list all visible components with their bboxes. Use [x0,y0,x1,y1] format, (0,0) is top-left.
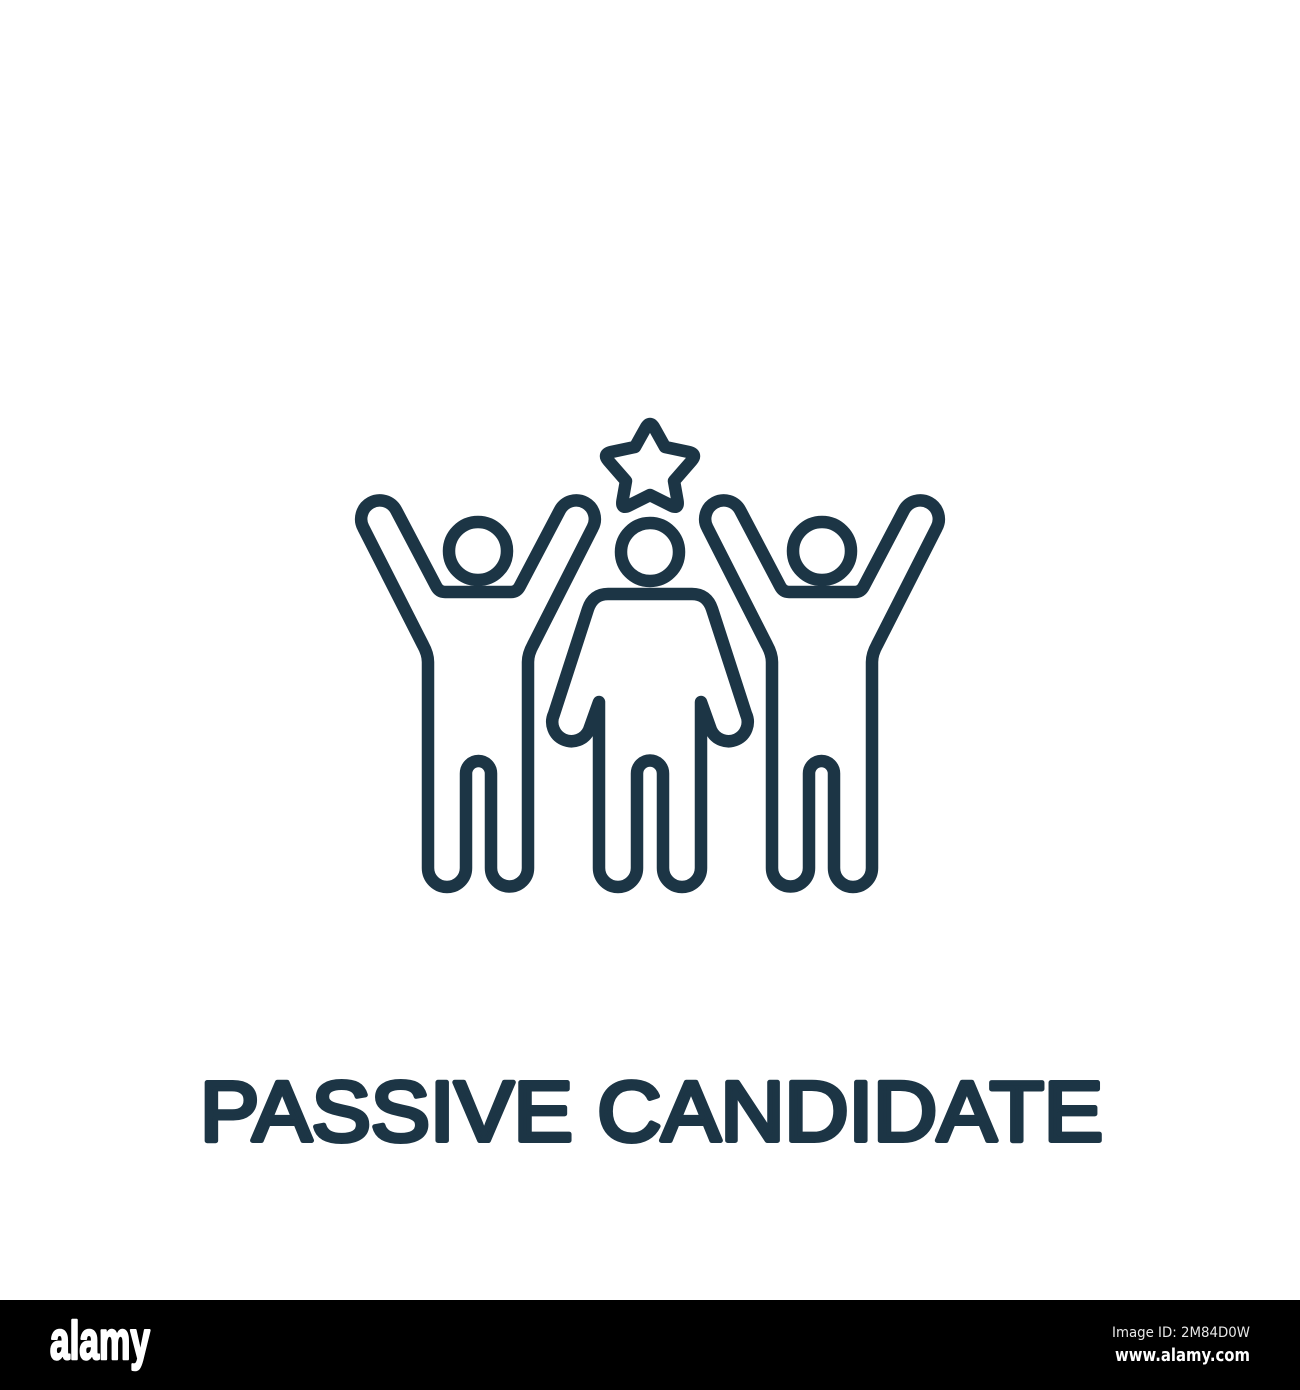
icon: center person head [621,523,679,581]
footer logo: alamy [50,1311,150,1371]
icon: center person body [552,594,748,887]
icon: passive candidate group with star [361,424,939,887]
footer image id: Image ID: 2M84D0W [1112,1325,1250,1341]
icon: right person body [705,500,939,887]
footer bar [0,1300,1300,1390]
footer website: www.alamy.com [1115,1345,1250,1366]
icon: right person head [793,522,851,580]
icon: star [606,424,694,507]
icon: left person head [449,522,507,580]
title: PASSIVE CANDIDATE [200,1064,1103,1158]
icon: left person body [361,500,595,887]
